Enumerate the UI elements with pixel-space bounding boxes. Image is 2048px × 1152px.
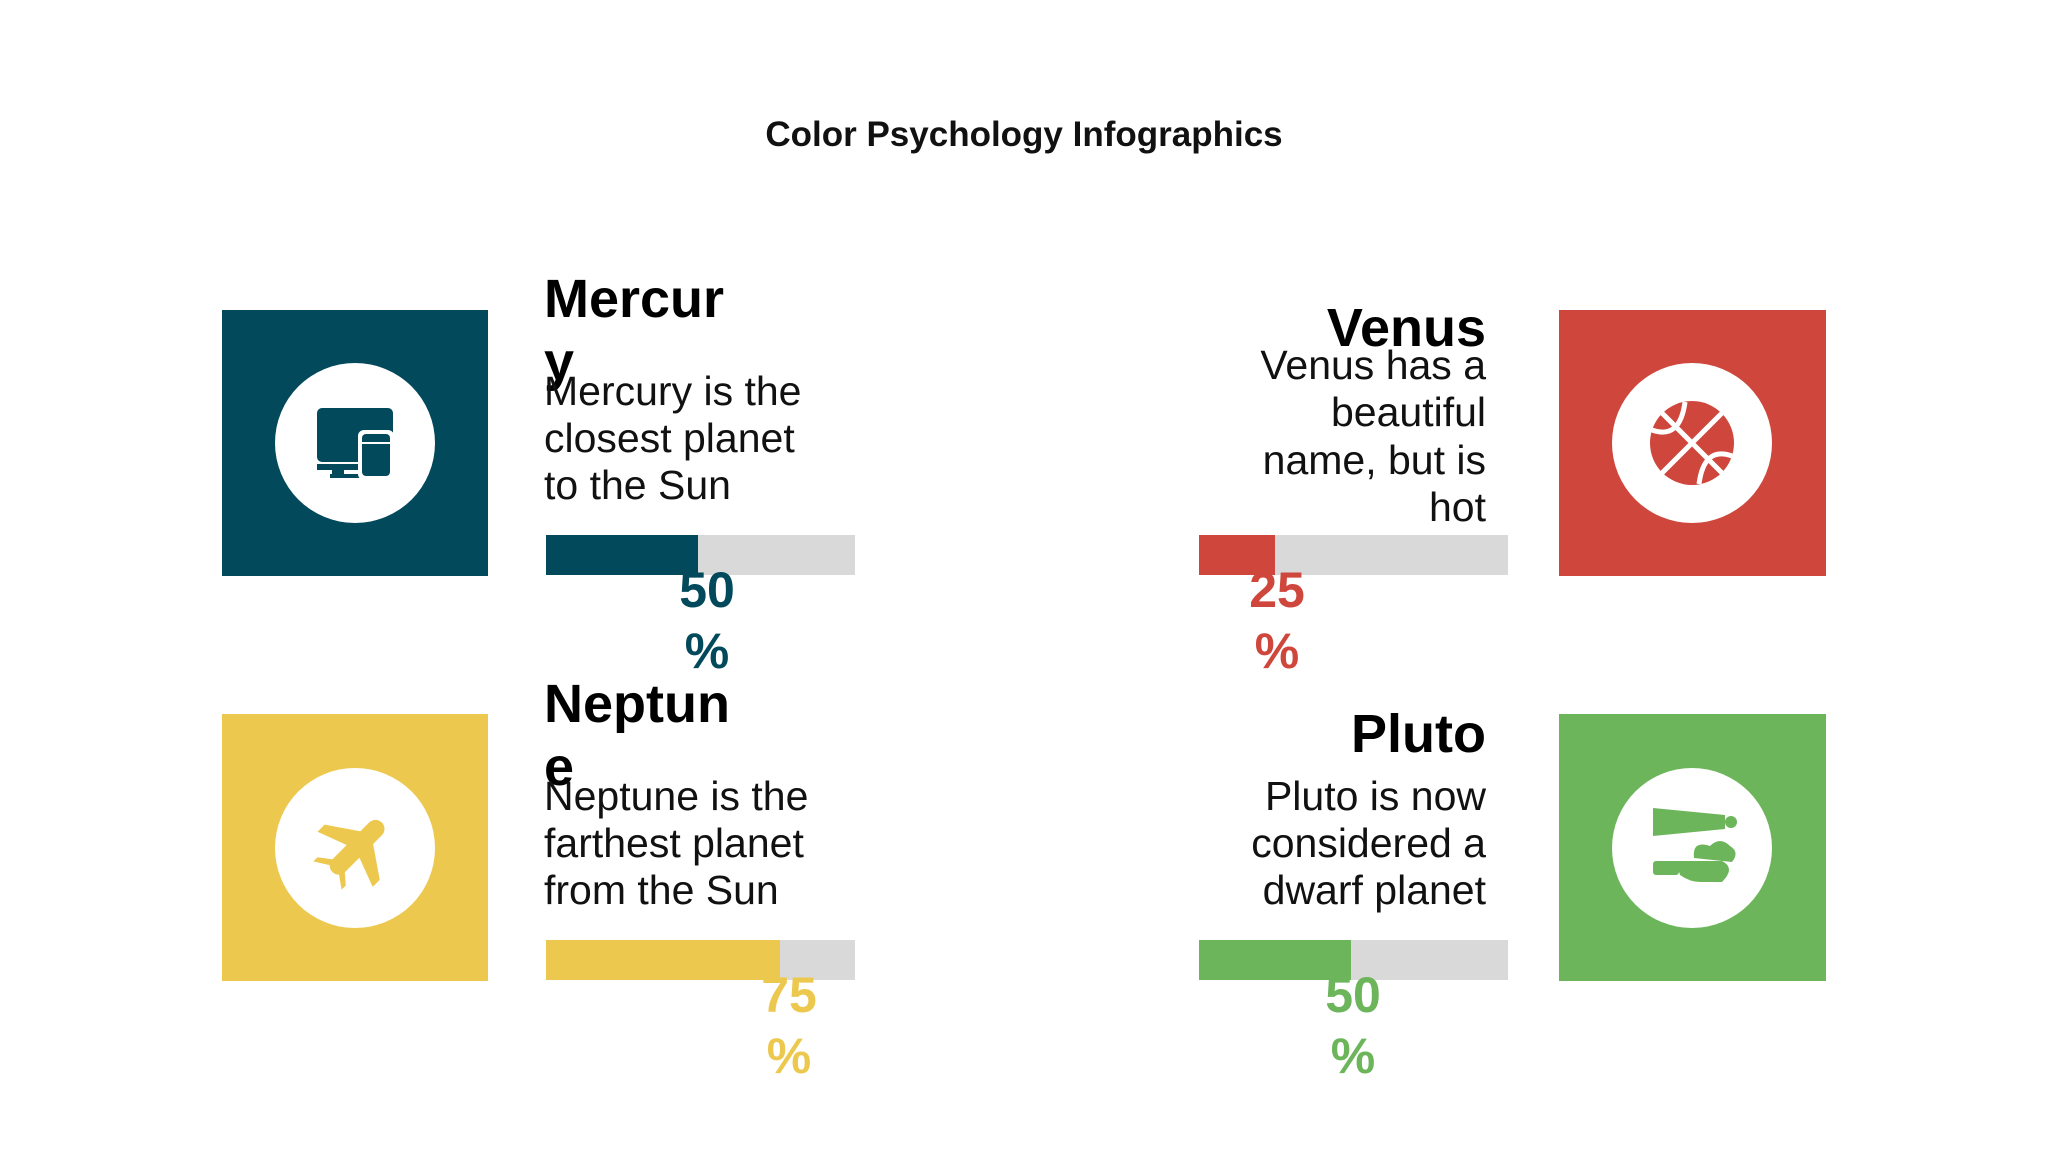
value: neptune: % [767,1028,811,1084]
text: venus: name, but is [1263,437,1486,483]
bar: neptune 75% [546,940,855,980]
panel: mercury [222,269,855,679]
icon box: pluto [1559,714,1826,981]
text: neptune: from the Sun [544,867,779,913]
text: venus: hot [1429,484,1487,530]
heading: venus: Venus [1327,298,1486,358]
value: mercury: 50 [679,562,735,618]
icon box: mercury [222,310,488,576]
text: mercury: Mercury is the [544,368,801,414]
panel: neptune [222,674,855,1084]
text: neptune: Neptune is the [544,773,808,819]
text: venus: Venus has a [1260,342,1486,388]
value: pluto: % [1331,1028,1375,1084]
text: pluto: Pluto is now [1265,773,1486,819]
icon box: venus [1559,310,1826,576]
bar: mercury 50% [546,535,855,575]
heading: neptune: e [544,737,574,797]
heading: pluto: Pluto [1351,704,1486,764]
value: pluto: 50 [1325,967,1381,1023]
heading: mercury: y [544,332,574,392]
value: mercury: % [685,623,729,679]
panel: pluto [1199,704,1826,1084]
value: venus: 25 [1249,562,1305,618]
text: pluto: dwarf planet [1263,867,1487,913]
heading: mercury: Mercur [544,269,724,329]
value: neptune: 75 [761,967,817,1023]
text: mercury: to the Sun [544,462,731,508]
panel: venus [1199,298,1826,679]
value: venus: % [1255,623,1299,679]
text: mercury: closest planet [544,415,795,461]
icon box: neptune [222,714,488,981]
bar: pluto 50% [1199,940,1508,980]
text: pluto: considered a [1251,820,1486,866]
text: neptune: farthest planet [544,820,804,866]
title: Color Psychology Infographics [765,115,1283,154]
text: venus: beautiful [1331,389,1486,435]
bar: venus 25% [1199,535,1508,575]
heading: neptune: Neptun [544,674,730,734]
